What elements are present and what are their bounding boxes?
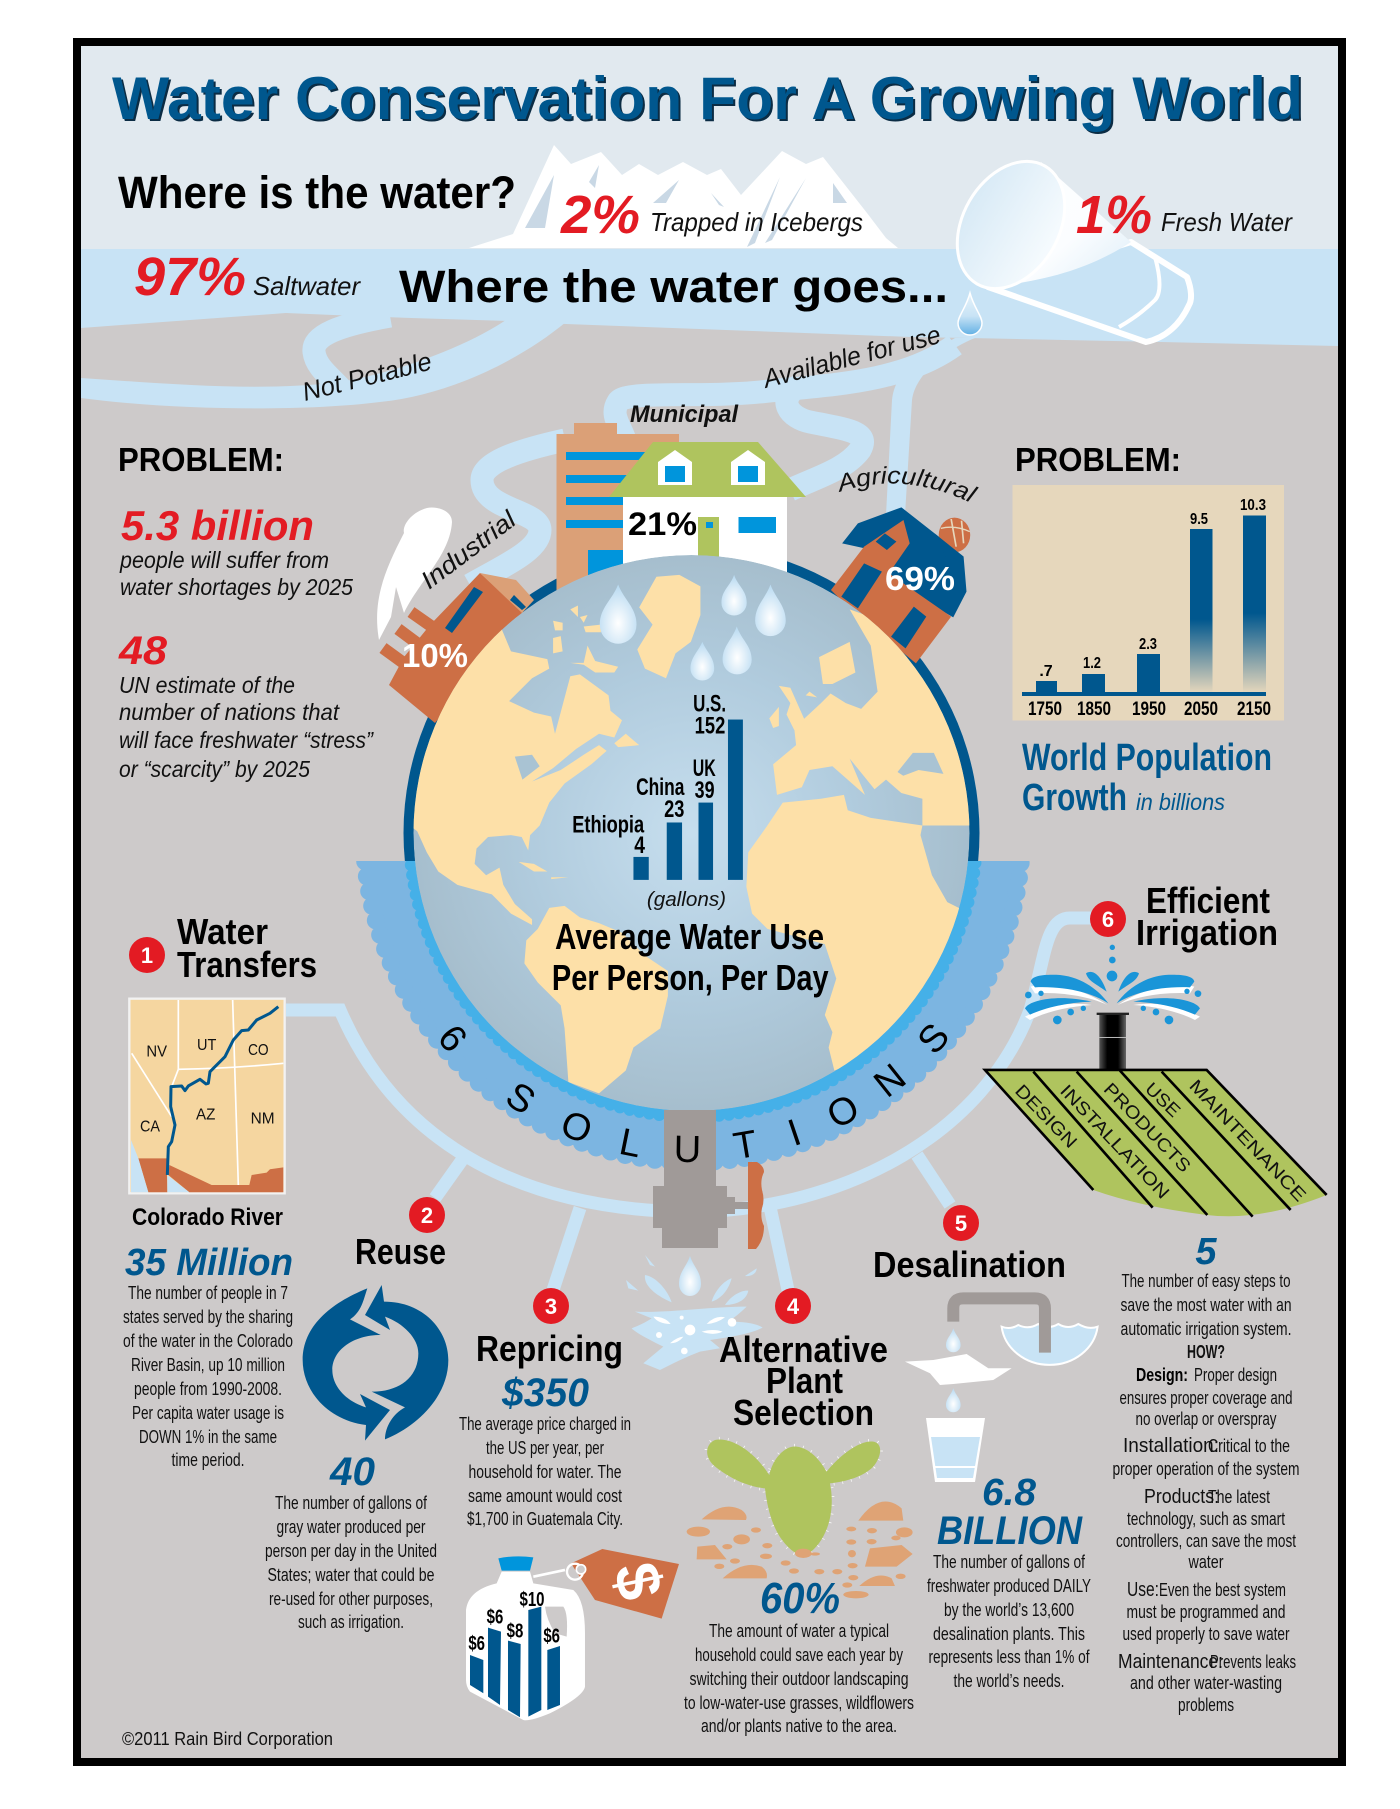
bar chart: average water use: Per Person, Per Day (552, 957, 829, 998)
label: not potable: Not Potable (299, 346, 435, 407)
solution 1: water transfers: River Basin, up 10 million (131, 1355, 285, 1375)
bar chart: average water use: 152 (695, 714, 725, 740)
solution 6: efficient irrigation: DESIGN (1011, 1081, 1081, 1152)
icon: faucet (653, 1110, 764, 1249)
solution 4: alternative plant selection: The amount of water a typical (709, 1621, 889, 1641)
connecting water pipe (286, 918, 1095, 1290)
stat: 2% trapped in icebergs: 2% (560, 185, 640, 245)
panel: left problem: water shortages by 2025 (120, 574, 353, 600)
solution 5: desalination: 6.8 (982, 1472, 1037, 1514)
solution 2: reuse: States; water that could be (268, 1565, 434, 1585)
solution 1: water transfers: The number of people in 7 (128, 1283, 288, 1303)
solution 4: alternative plant selection: and/or plants native to the area. (701, 1716, 897, 1736)
solution 6: efficient irrigation: proper operation of the system (1112, 1459, 1300, 1479)
solution 1: water transfers: NM (251, 1110, 275, 1127)
bar chart: average water use: Average Water Use (555, 916, 824, 957)
solution 3: repricing: The average price charged in (459, 1414, 631, 1434)
solution 3: repricing: $350 (501, 1371, 589, 1415)
label: agricultural: Agricultural (838, 466, 979, 502)
solution 4: alternative plant selection: 60% (760, 1574, 840, 1623)
percent labels: 10% and 69%: 69% (885, 560, 955, 597)
panel: right problem population chart: 1950 (1132, 699, 1166, 720)
solution 6: efficient irrigation: Critical to the (1208, 1436, 1290, 1456)
solution 6: efficient irrigation: INSTALLATION (1056, 1081, 1173, 1203)
solution 5: desalination: represents less than 1% of (928, 1647, 1090, 1667)
globe (400, 555, 982, 1111)
panel: right problem population chart: .7 (1039, 663, 1053, 680)
solution 4: alternative plant selection: 4 (787, 1294, 800, 1319)
solution 6: efficient irrigation: automatic irrigation system. (1120, 1319, 1292, 1339)
icon: pouring glass (935, 142, 1191, 342)
solution 4: alternative plant selection: Plant (766, 1360, 843, 1401)
icon: raindrops on globe (600, 575, 786, 681)
solution 6: efficient irrigation: The latest (1208, 1487, 1270, 1507)
panel: right problem population chart: 1750 (1028, 699, 1062, 720)
solution 5: desalination: freshwater produced DAILY (927, 1576, 1091, 1596)
solution 3: repricing: Repricing (476, 1328, 623, 1369)
solution 6: efficient irrigation: and other water-wasting (1130, 1673, 1282, 1693)
panel: left problem: 48 (118, 629, 168, 673)
solution 3: repricing: household for water. The (468, 1462, 622, 1482)
iceberg (469, 145, 898, 248)
text on arc: 6 solutions: S (910, 1016, 958, 1062)
solution 6: efficient irrigation: water (1188, 1552, 1224, 1572)
solution 5: desalination (873, 1205, 1098, 1691)
solution 3: repricing: $10 (519, 1588, 544, 1611)
text on arc: 6 solutions: 6 (429, 1017, 475, 1061)
solution 6: efficient irrigation: no overlap or overspray (1136, 1409, 1276, 1429)
solution 1: water transfers: people from 1990-2008. (134, 1379, 282, 1399)
solution 6: efficient irrigation: 6 (1102, 907, 1114, 932)
solution 3: repricing: $6 (543, 1624, 560, 1647)
solution 6: efficient irrigation: Efficient (1146, 880, 1270, 921)
panel: right problem population chart: 2050 (1184, 699, 1218, 720)
heading: where is the water: Where is the water? (118, 167, 516, 218)
rivers flowing to the uses (314, 316, 975, 585)
text on arc: 6 solutions: S (498, 1074, 542, 1123)
solution 6: efficient irrigation: Products: (1144, 1486, 1219, 1508)
solution 2: reuse: gray water produced per (276, 1517, 426, 1537)
solution 6: efficient irrigation: must be programmed and (1126, 1602, 1286, 1622)
building: municipal: 21% (628, 506, 697, 542)
solution 1: water transfers: Colorado River (132, 1204, 283, 1231)
panel: left problem: number of nations that (119, 699, 341, 725)
bar chart: average water use: UK (693, 756, 716, 782)
heading: where the water goes: Where the water goes... (399, 261, 948, 312)
stat: 1% fresh water: 1% (1076, 185, 1152, 245)
solution 2: reuse: The number of gallons of (275, 1493, 428, 1513)
water band: 97% saltwater (81, 249, 1338, 408)
percent labels: 10% and 69% (402, 560, 955, 674)
panel: left problem (118, 441, 374, 782)
solution 6: efficient irrigation: Use: (1127, 1579, 1159, 1601)
stat: 97% saltwater (134, 247, 361, 307)
solution 1: water transfers: time period. (172, 1450, 244, 1470)
solution 3: repricing: the US per year, per (486, 1438, 604, 1458)
solution 6: efficient irrigation (985, 880, 1327, 1715)
building: municipal: Municipal (630, 401, 739, 428)
solution 4: alternative plant selection: household could save each year by (695, 1645, 903, 1665)
solution 1: water transfers: Water (177, 911, 268, 952)
panel: right problem population chart: 2150 (1237, 699, 1271, 720)
solution 6: efficient irrigation: USE (1141, 1078, 1184, 1121)
solution 3: repricing: $8 (507, 1619, 523, 1642)
bar chart: average water use: U.S. (693, 691, 726, 717)
solution 4: alternative plant selection (684, 1288, 914, 1736)
panel: right problem population chart: Growth (1022, 777, 1127, 819)
label: available for use: Available for use (758, 319, 944, 394)
solution 3: repricing: 3 (545, 1294, 557, 1319)
bar chart: average water use (552, 691, 829, 998)
panel: right problem population chart: 2.3 (1139, 636, 1157, 653)
solution 6: efficient irrigation: Maintenance: (1118, 1651, 1223, 1673)
building: industrial factory: Industrial (416, 505, 523, 595)
panel: left problem: people will suffer from (119, 547, 329, 573)
bar chart: average water use: 39 (695, 778, 715, 804)
stat: 1% fresh water (1076, 185, 1293, 245)
solution 3: repricing: $6 (487, 1605, 503, 1628)
water bowl: 6 solutions band (356, 861, 1030, 1170)
solution 5: desalination: BILLION (937, 1509, 1083, 1553)
panel: left problem: UN estimate of the (119, 672, 295, 698)
solution 4: alternative plant selection: Alternative (719, 1329, 888, 1370)
panel: right problem population chart: 10.3 (1240, 497, 1266, 514)
stat: 2% trapped in icebergs: Trapped in Icebergs (650, 207, 863, 237)
solution 1: water transfers: 1 (141, 943, 153, 968)
panel: right problem population chart: in billions (1136, 789, 1225, 815)
solution 6: efficient irrigation: PRODUCTS (1100, 1079, 1195, 1176)
stat: 1% fresh water: Fresh Water (1161, 207, 1293, 237)
solution 3: repricing: $6 (468, 1632, 485, 1655)
stat: 2% trapped in icebergs (560, 185, 863, 245)
panel: right problem population chart (1012, 441, 1284, 819)
panel: left problem: 5.3 billion (121, 502, 314, 549)
solution 1: water transfers (123, 911, 317, 1470)
solution 6: efficient irrigation: The number of easy steps to (1122, 1271, 1290, 1291)
solution 6: efficient irrigation: Installation: (1123, 1435, 1219, 1457)
solution 1: water transfers: CO (248, 1042, 269, 1059)
solution 5: desalination: desalination plants. This (933, 1624, 1085, 1644)
solution 5: desalination: 5 (955, 1211, 967, 1236)
panel: left problem: will face freshwater “stress” (119, 727, 374, 753)
solution 6: efficient irrigation: Even the best system (1159, 1580, 1286, 1600)
solution 2: reuse: person per day in the United (265, 1541, 437, 1561)
solution 1: water transfers: Per capita water usage is (132, 1403, 284, 1423)
panel: right problem population chart: PROBLEM: (1015, 441, 1181, 478)
panel: right problem population chart: World Population (1022, 737, 1272, 779)
solution 2: reuse: re-used for other purposes, (269, 1589, 433, 1609)
solution 6: efficient irrigation: MAINTENANCE (1185, 1076, 1310, 1205)
solution 1: water transfers: 35 Million (125, 1242, 293, 1284)
text on arc: 6 solutions: N (867, 1056, 914, 1106)
solution 1: water transfers: CA (140, 1119, 161, 1136)
panel: left problem: or “scarcity” by 2025 (119, 756, 310, 782)
solution 1: water transfers: Transfers (177, 944, 317, 985)
solution 6: efficient irrigation: Prevents leaks (1210, 1652, 1296, 1672)
panel: right problem population chart: 9.5 (1190, 511, 1208, 528)
solution 6: efficient irrigation: Irrigation (1136, 912, 1278, 953)
icon: water splash (626, 1255, 763, 1370)
text on arc: 6 solutions: O (555, 1103, 598, 1153)
text on arc: 6 solutions: O (820, 1087, 866, 1138)
stat: 97% saltwater: Saltwater (253, 271, 361, 301)
solution 1: water transfers: of the water in the Colorado (123, 1331, 293, 1351)
solution 2: reuse: such as irrigation. (298, 1612, 404, 1632)
stat: 97% saltwater: 97% (134, 247, 246, 307)
solution 4: alternative plant selection: switching their outdoor landscaping (690, 1669, 908, 1689)
solution 1: water transfers: NV (146, 1044, 168, 1061)
solution 6: efficient irrigation: technology, such as smart (1127, 1509, 1285, 1529)
copyright: ©2011 Rain Bird Corporation (122, 1729, 333, 1749)
solution 3: repricing (459, 1288, 679, 1720)
solution 6: efficient irrigation: problems (1178, 1695, 1234, 1715)
solution 3: repricing: $1,700 in Guatemala City. (467, 1509, 623, 1529)
solution 1: water transfers: UT (197, 1037, 217, 1054)
solution 1: water transfers: states served by the sharing (123, 1307, 293, 1327)
panel: right problem population chart: 1850 (1077, 699, 1111, 720)
solution 6: efficient irrigation: HOW? (1187, 1342, 1225, 1362)
solution 2: reuse: Reuse (355, 1231, 446, 1272)
solution 2: reuse: 2 (421, 1203, 433, 1228)
building: agricultural barn (831, 507, 970, 663)
solution 6: efficient irrigation: Proper design (1194, 1365, 1277, 1385)
text on arc: 6 solutions: U (673, 1129, 702, 1171)
text on arc: 6 solutions: T (730, 1123, 760, 1168)
solution 6: efficient irrigation: 5 (1195, 1231, 1217, 1273)
text on arc: 6 solutions: L (616, 1121, 645, 1166)
text on arc: 6 solutions (429, 1016, 958, 1171)
title: Water Conservation For A Growing World (112, 65, 1303, 132)
solution 6: efficient irrigation: used properly to save water (1122, 1624, 1290, 1644)
icon: falling drop (958, 293, 982, 335)
solution 5: desalination: by the world’s 13,600 (944, 1600, 1074, 1620)
solution 5: desalination: Desalination (873, 1244, 1066, 1285)
bar chart: average water use: (gallons) (647, 888, 726, 911)
bar chart: average water use: 4 (634, 833, 646, 859)
solution 6: efficient irrigation: controllers, can save the most (1116, 1531, 1296, 1551)
solution 5: desalination: the world’s needs. (954, 1671, 1064, 1691)
solution 3: repricing: $ (600, 1557, 675, 1606)
panel: left problem: PROBLEM: (118, 441, 284, 478)
percent labels: 10% and 69%: 10% (402, 637, 468, 674)
solution 2: reuse (265, 1197, 448, 1632)
solution 4: alternative plant selection: to low-water-use grasses, wildflowers (684, 1693, 914, 1713)
solution 1: water transfers: DOWN 1% in the same (139, 1427, 277, 1447)
solution 5: desalination: The number of gallons of (933, 1552, 1086, 1572)
panel: right problem population chart: 1.2 (1083, 655, 1101, 672)
solution 3: repricing: same amount would cost (468, 1486, 622, 1506)
bar chart: average water use: 23 (664, 797, 684, 823)
solution 6: efficient irrigation: save the most water with an (1120, 1295, 1292, 1315)
bar chart: average water use: China (636, 775, 685, 801)
globe ring (404, 545, 980, 1121)
building: municipal (556, 401, 806, 600)
bar chart: average water use: Ethiopia (572, 812, 645, 838)
solution 4: alternative plant selection: Selection (733, 1392, 874, 1433)
solution 6: efficient irrigation: ensures proper coverage and (1120, 1388, 1292, 1408)
text on arc: 6 solutions: I (783, 1112, 806, 1155)
building: industrial factory (377, 505, 534, 723)
solution 1: water transfers: AZ (196, 1106, 216, 1123)
solution 2: reuse: 40 (329, 1450, 375, 1494)
solution 6: efficient irrigation: Design: (1136, 1365, 1188, 1385)
